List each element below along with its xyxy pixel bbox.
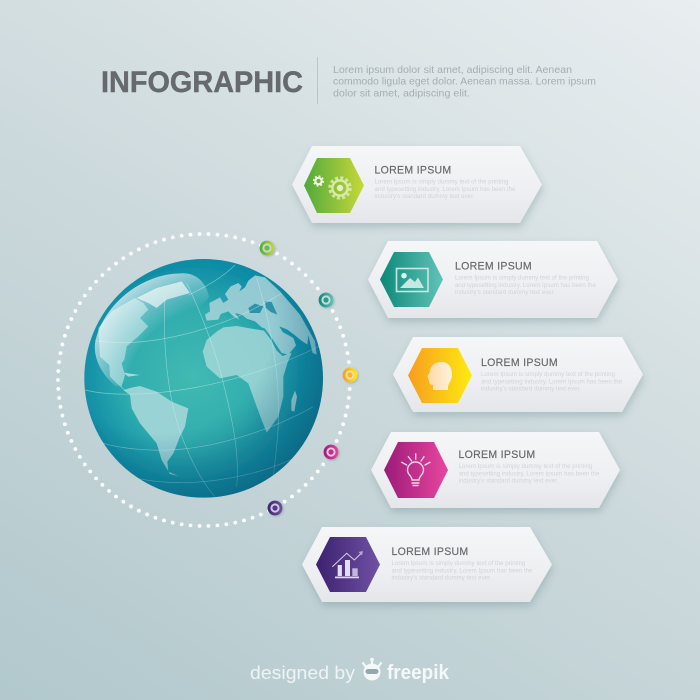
- body text: and typesetting industry. Lorem Ipsum has been the: [458, 470, 600, 477]
- footer: designed by freepik: [250, 658, 450, 684]
- icon: freepik mascot: [363, 658, 381, 680]
- icon: head profile: [428, 362, 452, 390]
- title: INFOGRAPHIC: [101, 66, 303, 99]
- island: Madagascar: [291, 391, 297, 412]
- body text: Lorem Ipsum is simply dummy text of the printing: [374, 178, 509, 186]
- panel: card 4: [371, 432, 620, 508]
- right-side shading: [94, 292, 323, 498]
- icon: light bulb: [402, 454, 430, 486]
- marker: magenta: [324, 445, 338, 459]
- hexagon: green: [304, 158, 364, 213]
- marker: green: [260, 241, 274, 255]
- continent: South America: [123, 386, 188, 476]
- continent: Eurasia: [205, 275, 317, 355]
- intro text block: dolor sit amet, adipiscing elit.: [333, 87, 470, 99]
- heading: LOREM IPSUM: [455, 260, 532, 272]
- body text: and typesetting industry. Lorem Ipsum has been the: [455, 282, 596, 289]
- intro text block: [333, 64, 596, 99]
- icon: bar chart with arrow: [332, 551, 363, 578]
- marker: teal: [319, 293, 333, 307]
- body text: industry's standard dummy text ever.: [455, 289, 555, 296]
- panel: card 2: [368, 241, 618, 318]
- panel: card 5: [302, 527, 552, 602]
- footer: designed by freepik: freepik: [387, 662, 450, 684]
- continent: Africa: [203, 326, 292, 433]
- hexagon: purple: [316, 537, 380, 592]
- hexagon: orange: [408, 348, 472, 403]
- gloss highlight: [95, 273, 209, 387]
- marker: purple: [268, 501, 282, 515]
- marker: orange: [343, 368, 357, 382]
- heading: LOREM IPSUM: [392, 546, 468, 558]
- body text: industry's standard dummy text ever.: [458, 478, 559, 484]
- body text: Lorem Ipsum is simply dummy text of the printing: [392, 560, 526, 567]
- heading: LOREM IPSUM: [374, 164, 452, 176]
- icon: picture: [396, 268, 428, 292]
- body text: [455, 274, 596, 296]
- body text: and typesetting industry. Lorem Ipsum has been the: [481, 378, 622, 385]
- body text: [392, 560, 533, 582]
- heading: LOREM IPSUM: [458, 449, 536, 461]
- hexagon: teal: [380, 252, 443, 307]
- body text: industry's standard dummy text ever.: [374, 193, 475, 200]
- globe grid lines: [85, 265, 322, 497]
- body text: industry's standard dummy text ever.: [392, 574, 492, 582]
- body text: [481, 371, 622, 392]
- body text: [458, 463, 600, 484]
- icon: gears: [314, 176, 350, 198]
- island: Greenland: [137, 281, 190, 308]
- body text: and typesetting industry. Lorem Ipsum has been the: [374, 186, 516, 193]
- island: Caribbean: [123, 373, 140, 377]
- hexagon: magenta: [384, 442, 448, 498]
- heading: LOREM IPSUM: [481, 357, 558, 369]
- body text: industry's standard dummy text ever.: [481, 386, 581, 392]
- intro text block: Lorem ipsum dolor sit amet, adipiscing elit. Aenean: [333, 64, 572, 76]
- dotted orbit ring: [58, 234, 350, 526]
- panel: card 3: [393, 337, 643, 412]
- globe: [84, 259, 323, 498]
- intro text block: commodo ligula eget dolor. Aenean massa. Lorem ipsum: [333, 76, 596, 88]
- panel: card 1: [292, 146, 542, 223]
- body text: Lorem Ipsum is simply dummy text of the printing: [455, 274, 589, 282]
- continent: North America: [98, 298, 148, 393]
- body text: and typesetting industry. Lorem Ipsum has been the: [392, 567, 533, 574]
- body text: Lorem Ipsum is simply dummy text of the printing: [481, 371, 615, 378]
- body text: Lorem Ipsum is simply dummy text of the printing: [458, 463, 593, 470]
- footer: designed by freepik: designed by: [250, 662, 356, 683]
- body text: [374, 178, 516, 200]
